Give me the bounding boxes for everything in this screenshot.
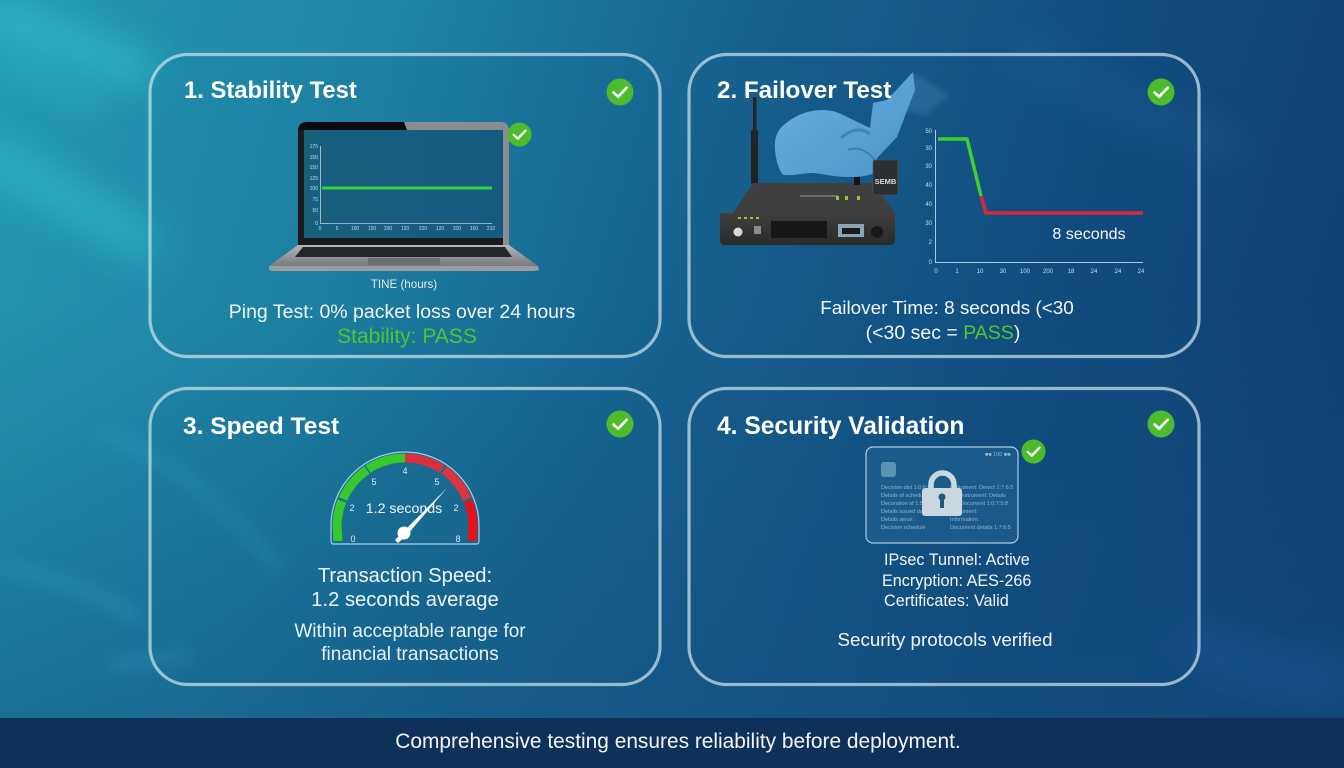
icon: card check	[1021, 439, 1046, 464]
certificate card with lock: Decision schedule	[881, 525, 926, 531]
stability chart: 0	[315, 221, 318, 227]
chart label: 8 seconds: 8 seconds	[1052, 225, 1126, 243]
failover chart: 1	[955, 269, 959, 275]
stability chart: 200	[384, 226, 392, 232]
router with gloved hand: SEMB	[875, 177, 897, 186]
certificate card with lock: Document details 1:7:6:5	[950, 525, 1011, 531]
certificate card with lock: Instrument:	[950, 509, 978, 515]
text: acceptable range: financial transactions	[321, 644, 499, 665]
text: stability pass: Stability: PASS	[337, 325, 477, 348]
text: security status: Encryption: AES-266	[882, 572, 1031, 590]
text: security status: IPsec Tunnel: Active	[884, 551, 1030, 569]
certificate card with lock: ■■ 100 ■■	[985, 452, 1011, 458]
speedometer gauge: 8	[455, 534, 461, 544]
failover chart: 30	[925, 221, 933, 227]
stability chart: 160	[470, 226, 478, 232]
stability chart: 125	[310, 176, 318, 182]
failover chart: 24	[1138, 269, 1145, 275]
certificate card with lock: Details of schedule	[881, 493, 927, 499]
heading: Failover Test: 2. Failover Test	[717, 77, 891, 104]
failover chart: 0	[934, 269, 938, 275]
stability chart: 75	[312, 197, 318, 203]
certificate card with lock	[866, 447, 1018, 543]
stability chart: 120	[401, 226, 409, 232]
icon: panel check	[1148, 78, 1174, 106]
stability chart: 120	[436, 226, 444, 232]
heading: Security Validation: 4. Security Validation	[717, 413, 964, 440]
gauge needle	[395, 488, 447, 543]
heading: Speed Test: 3. Speed Test	[183, 413, 339, 440]
icon: laptop check	[507, 122, 532, 147]
text: security status: Certificates: Valid	[884, 592, 1009, 610]
icon: panel check	[1148, 410, 1174, 438]
icon: panel check	[606, 410, 634, 438]
stability chart: 100	[310, 186, 318, 192]
stability chart: 0	[319, 226, 322, 232]
failover chart: 200	[1043, 269, 1054, 275]
failover chart: 18	[1068, 269, 1075, 275]
certificate card with lock: Information:	[950, 517, 980, 523]
failover chart	[925, 129, 1145, 275]
stability chart	[310, 144, 495, 232]
certificate card with lock: Decision dist 1:0:6:5	[881, 485, 931, 491]
stability chart: 210	[487, 226, 495, 232]
failover chart: 40	[925, 202, 933, 208]
text: ping result: Ping Test: 0% packet loss over 24 hours	[229, 301, 575, 323]
stability chart: 150	[310, 155, 318, 161]
failover chart: 30	[925, 146, 933, 152]
speedometer gauge: 5	[434, 477, 440, 487]
speedometer gauge: 5	[371, 477, 377, 487]
panel: 2. Failover Test	[689, 54, 1199, 356]
stability chart: 50	[312, 208, 318, 214]
stability chart: 150	[310, 165, 318, 171]
text: acceptable range	[294, 621, 526, 665]
failover chart: 40	[925, 183, 933, 189]
panel: 3. Speed Test	[150, 388, 660, 684]
speedometer gauge	[331, 452, 479, 544]
panel: 1. Stability Test	[150, 54, 660, 356]
certificate card with lock: Instrument: Details	[960, 493, 1006, 499]
router with gloved hand	[720, 72, 950, 245]
text: failover time: Failover Time: 8 seconds (<30	[820, 298, 1074, 319]
footer text: Comprehensive testing ensures reliability before deployment.	[395, 730, 961, 753]
stability chart: 150	[368, 226, 376, 232]
text: transaction speed	[311, 565, 499, 611]
speedometer gauge: 2	[349, 503, 355, 513]
panel: 4. Security Validation	[689, 388, 1199, 684]
certificate card with lock: Document 1:0:7:5:8	[960, 501, 1008, 507]
certificate card with lock: Decoration of 1:5:0	[881, 501, 927, 507]
failover chart: 2	[929, 240, 933, 246]
certificate card with lock: Instrument: Detect 1:7:6:5	[950, 485, 1013, 491]
stability chart: 5	[336, 226, 339, 232]
stability chart: 200	[453, 226, 461, 232]
text: transaction speed: 1.2 seconds average	[311, 589, 499, 611]
certificate card with lock: Details since:	[881, 517, 914, 523]
failover chart: 24	[1115, 269, 1122, 275]
icon: panel check	[606, 78, 634, 106]
gauge value: 1.2 seconds	[366, 501, 442, 517]
certificate card with lock: Details issued date	[881, 509, 927, 515]
stability chart: 175	[310, 144, 318, 150]
stability chart: 220	[419, 226, 427, 232]
speedometer gauge: 4	[402, 466, 408, 476]
stability chart: 100	[351, 226, 359, 232]
axis label: TINE (hours)	[371, 278, 437, 291]
footer banner	[0, 718, 1344, 768]
failover chart: 30	[925, 164, 933, 170]
speedometer gauge: 0	[350, 534, 356, 544]
text: acceptable range: Within acceptable range for	[294, 621, 526, 642]
failover chart: 24	[1091, 269, 1098, 275]
laptop with line chart	[269, 122, 539, 271]
text: failover pass: (<30 sec = PASS)	[866, 322, 1020, 344]
heading: Stability Test: 1. Stability Test	[184, 77, 357, 104]
failover chart: 100	[1020, 269, 1031, 275]
speedometer gauge: 2	[453, 503, 459, 513]
text: protocols verified: Security protocols verified	[837, 629, 1053, 650]
text: transaction speed: Transaction Speed:	[318, 565, 492, 587]
failover chart: 30	[1000, 269, 1007, 275]
failover chart: 0	[929, 260, 933, 266]
text: security status	[882, 551, 1031, 610]
icon: padlock	[922, 473, 962, 516]
failover chart: 50	[925, 129, 933, 135]
failover chart: 10	[977, 269, 984, 275]
